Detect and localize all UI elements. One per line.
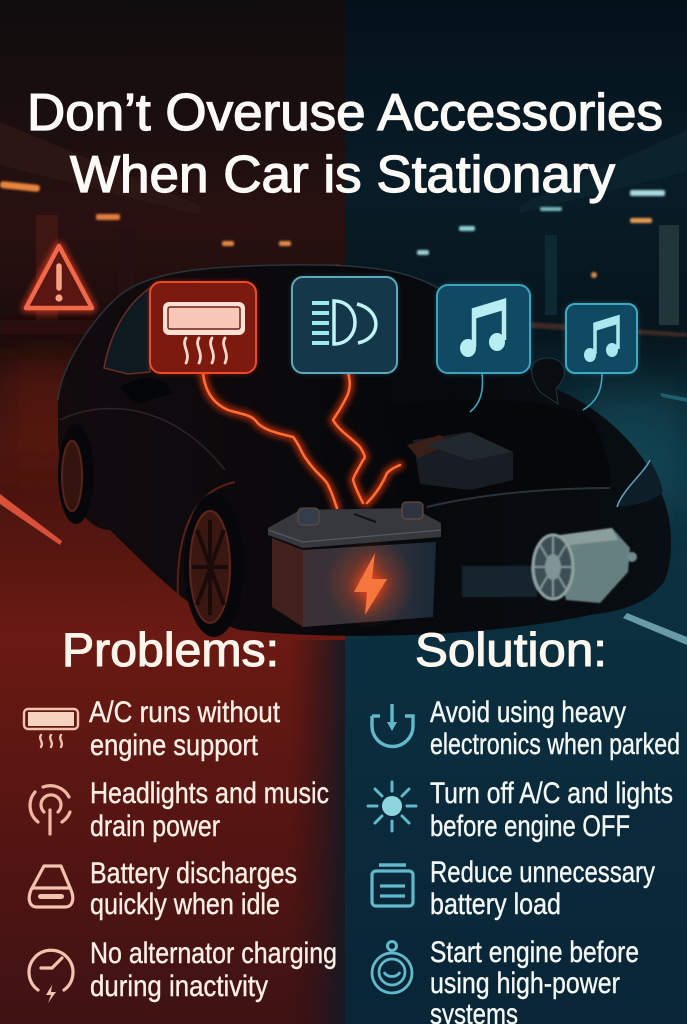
panel: problems list bbox=[24, 696, 337, 1003]
solution 2 icon: sun bbox=[368, 782, 416, 831]
problem 3 text: Battery discharges bbox=[90, 857, 297, 890]
problem 2 text: Headlights and music bbox=[90, 777, 329, 810]
problem 2 text: drain power bbox=[90, 810, 220, 843]
problem 4 text: No alternator charging bbox=[90, 937, 337, 970]
title bbox=[27, 84, 663, 204]
solution 4 text: Start engine before bbox=[430, 936, 639, 969]
problem 1 icon: A/C bbox=[24, 709, 78, 747]
warning triangle bbox=[26, 246, 92, 308]
icon card: music large bbox=[437, 285, 530, 373]
icon card: air conditioner bbox=[150, 282, 256, 373]
problem 3 icon: battery bbox=[29, 866, 73, 907]
headlight bbox=[617, 460, 662, 507]
heading: solution: Solution: bbox=[415, 623, 607, 676]
problem 2 icon: antenna bbox=[30, 786, 70, 834]
title: When Car is Stationary bbox=[70, 146, 615, 204]
problem 3 text: quickly when idle bbox=[90, 888, 280, 921]
panel: solutions list bbox=[368, 696, 680, 1024]
solution 1 text: Avoid using heavy bbox=[430, 696, 626, 729]
solution 4 icon: ignition bbox=[372, 942, 412, 993]
rear wheel bbox=[58, 424, 94, 524]
icon card: music small bbox=[566, 304, 637, 373]
solution 2 text: before engine OFF bbox=[430, 810, 630, 843]
title: Don’t Overuse Accessories bbox=[27, 84, 663, 142]
front wheel bbox=[184, 493, 244, 637]
icon card: headlight bbox=[292, 277, 397, 373]
alternator bbox=[462, 528, 637, 603]
problem 1 text: engine support bbox=[90, 729, 259, 762]
solution 3 icon: battery bbox=[372, 865, 413, 906]
fender arch highlight bbox=[178, 482, 235, 600]
blue wires bbox=[470, 373, 602, 412]
battery bbox=[268, 502, 441, 628]
lightning wires bbox=[203, 358, 400, 508]
parking garage scenery bbox=[0, 122, 687, 645]
problem 4 icon: gauge bbox=[29, 950, 73, 1003]
solution 1 icon: power bbox=[372, 704, 413, 746]
solution 4 text: using high-power bbox=[430, 967, 620, 1000]
battery bolt bbox=[354, 553, 387, 615]
side mirror bbox=[532, 358, 564, 404]
heading: problems: Problems: bbox=[62, 623, 279, 676]
solution 3 text: battery load bbox=[430, 888, 561, 921]
car body bbox=[58, 265, 671, 637]
engine bay bbox=[385, 399, 610, 510]
problem 4 text: during inactivity bbox=[90, 970, 268, 1003]
problem 1 text: A/C runs without bbox=[89, 696, 281, 729]
